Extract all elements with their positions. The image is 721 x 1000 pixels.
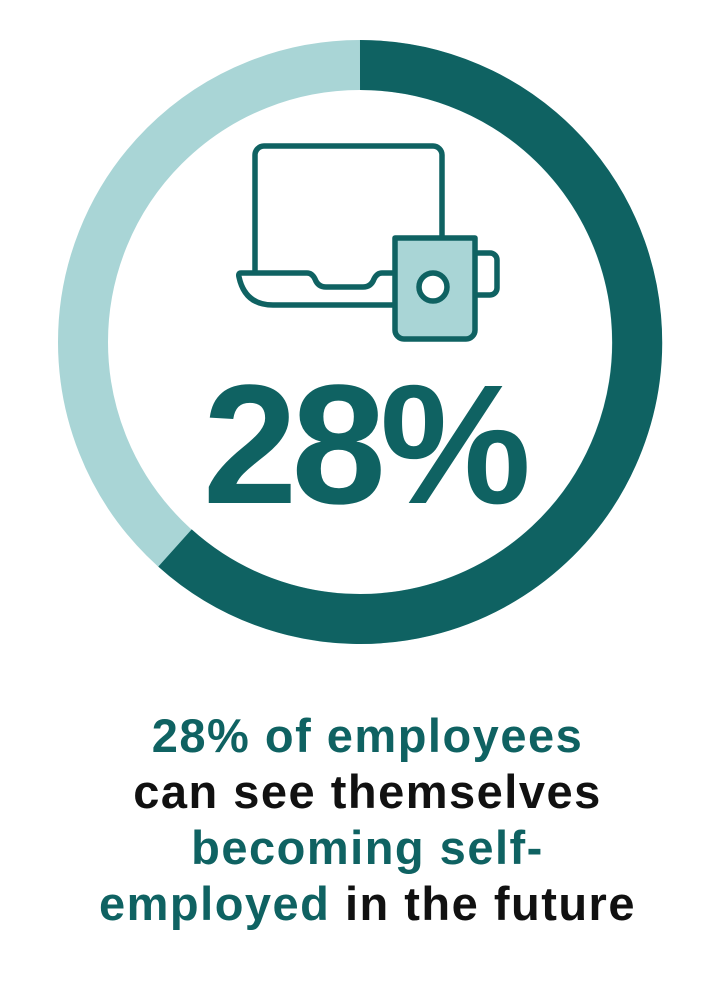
caption text: employed in the future — [99, 877, 636, 930]
donut chart — [58, 40, 662, 644]
caption text: 28% of employees — [152, 709, 583, 762]
ring background — [83, 65, 637, 619]
caption text — [99, 709, 636, 930]
ring dark arc — [175, 65, 637, 619]
big percentage: 28% — [203, 350, 527, 540]
caption text: becoming self- — [191, 821, 544, 874]
icon: laptop and mug — [239, 146, 497, 339]
caption text: can see themselves — [133, 765, 602, 818]
